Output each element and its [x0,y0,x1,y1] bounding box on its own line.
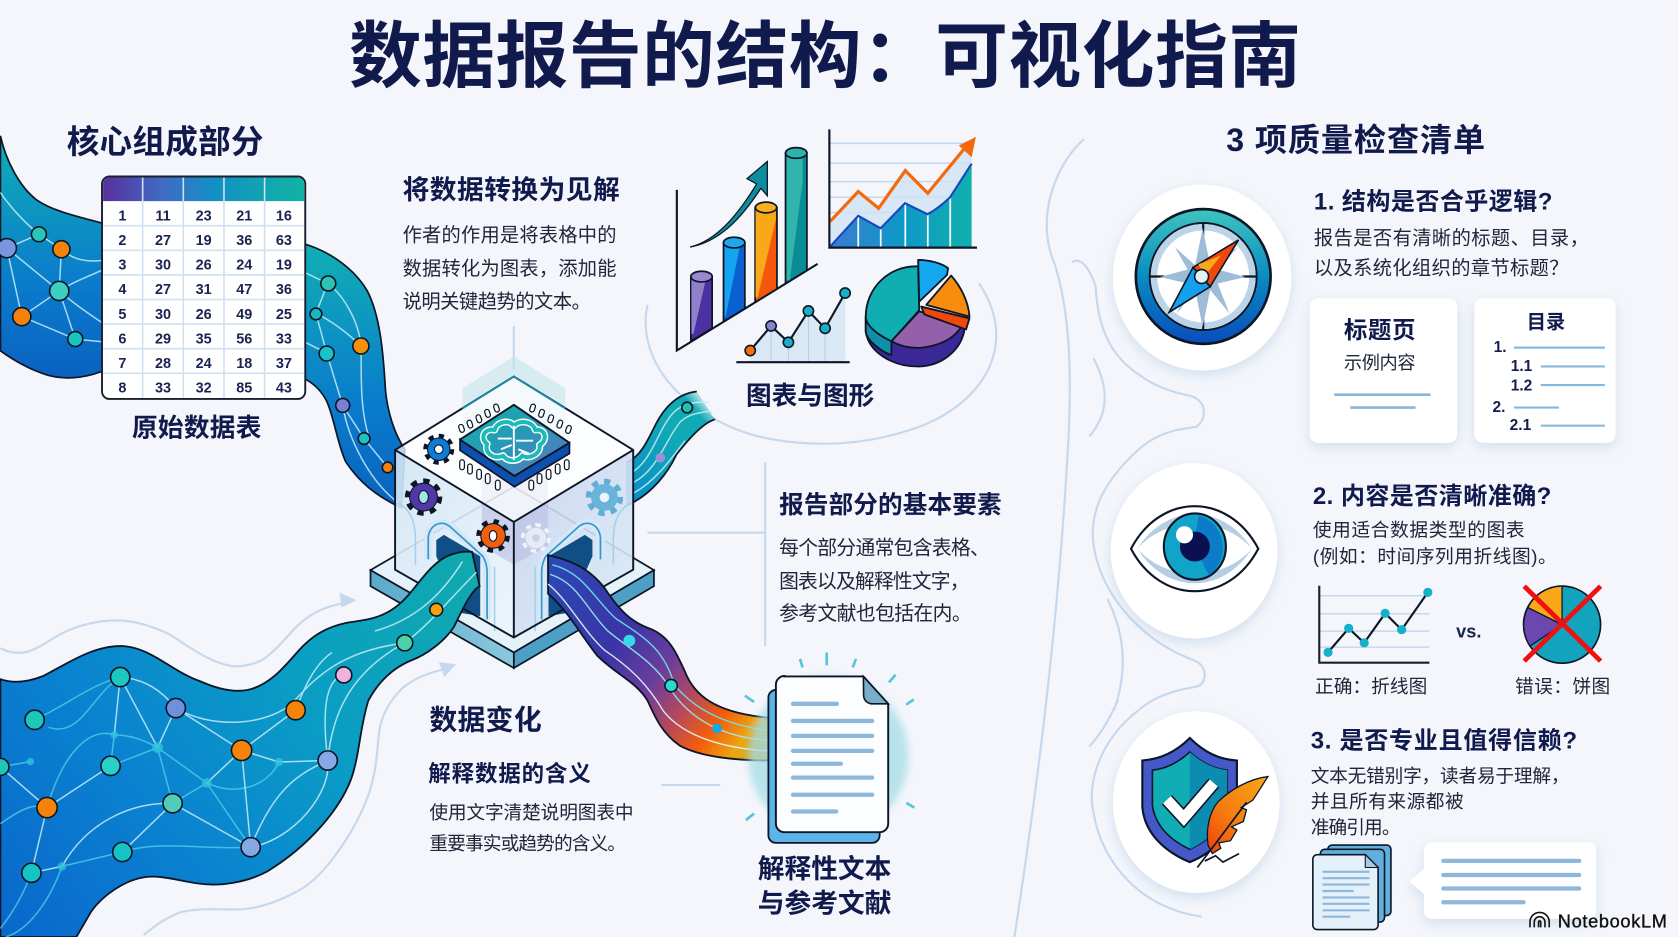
table numbers: 36 [236,233,252,249]
icon: stacked source documents [1313,845,1391,930]
caption: explanatory text and references [758,854,891,918]
text block: turning data into insight [403,175,620,313]
table numbers: 30 [155,307,171,323]
cube edges [395,377,633,638]
table numbers: 16 [276,208,292,224]
table numbers: 3 [118,258,126,274]
left gate [428,523,487,619]
table numbers: 27 [155,282,171,298]
table numbers: 28 [155,356,171,372]
bar chart with arrow [677,148,818,351]
label: vs: vs. [1456,622,1481,642]
text block: turning data into insight: 说明关键趋势的文本。 [403,291,591,313]
white inner links [0,562,476,873]
text block: essential report elements [779,491,1002,625]
cyan inner links [0,677,279,937]
caption: raw data table: 原始数据表 [132,413,262,442]
icon: shield and quill [1113,711,1280,893]
text block: check 3 [1311,728,1577,838]
icon: compass [1113,185,1291,371]
area chart with orange trend line [829,129,977,248]
text block: check 1 [1314,189,1589,279]
table numbers [118,208,292,397]
table numbers: 21 [236,208,252,224]
title: 数据报告的结构：可视化指南 [349,16,1301,97]
text block: turning data into insight: 数据转化为图表，添加能 [403,258,617,280]
text block: data changes [428,704,634,854]
table numbers: 23 [196,208,212,224]
text block: data changes: 解释数据的含义 [428,761,591,786]
card: title page: 示例内容 [1344,353,1416,373]
decorative flow lines [0,139,1205,937]
cube top face [395,377,633,522]
table numbers: 26 [196,258,212,274]
table numbers: 63 [276,233,292,249]
river: raw data flow behind the table [0,136,405,508]
central cube processor [370,356,654,668]
gear: light blue [589,482,619,512]
card: title page: 标题页 [1344,317,1416,343]
table numbers: 19 [276,258,292,274]
text block: check 1: 1. 结构是否合乎逻辑? [1314,189,1552,216]
table numbers: 26 [196,307,212,323]
inner pipes [398,503,630,631]
table numbers: 27 [155,233,171,249]
text block: check 3: 3. 是否专业且值得信赖? [1311,728,1577,755]
table numbers: 37 [276,356,292,372]
text block: check 2: (例如：时间序列用折线图)。 [1313,546,1557,567]
table numbers: 47 [236,282,252,298]
text block: check 3: 准确引用。 [1311,817,1401,838]
text block: turning data into insight: 将数据转换为见解 [403,175,620,205]
lower flow arrow [144,662,456,935]
river: output to charts [626,391,715,506]
right gate [542,523,600,619]
text block: data changes: 使用文字清楚说明图表中 [429,802,634,823]
table numbers: 31 [196,282,212,298]
river: main network data flow [0,552,480,937]
heading: core components: 核心组成部分 [67,123,264,160]
card: table of contents: 1.2 [1511,377,1532,394]
card: table of contents [1474,298,1616,443]
text block: essential report elements: 图表以及解释性文字， [779,571,969,593]
card: table of contents: 1.1 [1511,358,1533,375]
text block: essential report elements: 参考文献也包括在内。 [779,603,972,625]
icon: eye [1111,463,1278,639]
gear: orange [480,523,506,549]
NotebookLM logo: NotebookLM [1558,911,1667,931]
3D pie chart [866,260,969,366]
chart captions: 正确：折线图 [1315,676,1427,697]
table numbers: 2 [118,233,126,249]
table numbers: 18 [236,356,252,372]
table numbers: 49 [236,307,252,323]
table numbers: 56 [236,331,252,347]
text block: check 2: 使用适合数据类型的图表 [1313,519,1525,540]
text block: check 2: 2. 内容是否清晰准确? [1313,483,1551,510]
chart captions [1315,676,1610,697]
raw data table [102,176,305,399]
ghost column [462,356,565,483]
chart: wrong pie chart crossed out [1524,586,1601,663]
text block: check 1: 报告是否有清晰的标题、目录， [1314,227,1589,249]
explanatory document glow [748,676,909,836]
text block: check 2 [1313,483,1557,567]
text block: data changes: 重要事实或趋势的含义。 [429,833,626,854]
table numbers: 1 [118,208,126,224]
table numbers: 43 [276,381,292,397]
card: table of contents: 2.1 [1510,417,1532,434]
table numbers: 30 [155,258,171,274]
table numbers: 4 [118,282,126,298]
text block: essential report elements: 每个部分通常包含表格、 [779,538,990,560]
inner column [482,476,548,565]
table numbers: 29 [155,331,171,347]
caption: charts and graphs: 图表与图形 [746,381,874,410]
table numbers: 8 [118,381,126,397]
card: table of contents: 2. [1493,399,1505,416]
table numbers: 24 [196,356,212,372]
table numbers: 85 [236,381,252,397]
caption: explanatory text and references: 解释性文本 [758,854,891,884]
text block: check 3: 并且所有来源都被 [1311,791,1464,812]
caption: explanatory text and references: 与参考文献 [758,888,891,918]
gear: purple [409,482,439,512]
callout with text lines [1409,842,1596,919]
table numbers: 19 [196,233,212,249]
river: purple to orange flow to document [548,555,768,761]
table numbers: 5 [118,307,126,323]
text block: essential report elements: 报告部分的基本要素 [779,491,1002,519]
table numbers: 35 [196,331,212,347]
table numbers: 36 [276,282,292,298]
card: table of contents: 目录 [1527,311,1565,333]
table numbers: 11 [155,208,171,224]
table numbers: 7 [118,356,126,372]
gear: pale [524,526,548,550]
table numbers: 33 [276,331,292,347]
upper flow arrow [0,593,357,666]
cube right face [514,450,633,638]
table numbers: 6 [118,331,126,347]
card: table of contents: 1. [1494,339,1507,356]
table numbers: 25 [276,307,292,323]
icon: document stack [745,652,914,843]
table numbers: 24 [236,258,252,274]
chart: correct line chart [1319,586,1432,663]
cube left face [395,450,514,638]
platform [370,487,654,668]
chart captions: 错误：饼图 [1515,676,1610,697]
text block: data changes: 数据变化 [429,704,542,735]
chip with brain [460,405,569,488]
small line chart [736,288,850,362]
text block: turning data into insight: 作者的作用是将表格中的 [403,225,617,247]
heading: quality checklist: 3 项质量检查清单 [1226,122,1485,158]
text block: check 3: 文本无错别字，读者易于理解， [1311,765,1570,786]
table numbers: 33 [155,381,171,397]
gear: blue [426,437,451,462]
table numbers: 32 [196,381,212,397]
card: title page [1310,298,1457,443]
text block: check 1: 以及系统化组织的章节标题？ [1314,257,1568,279]
